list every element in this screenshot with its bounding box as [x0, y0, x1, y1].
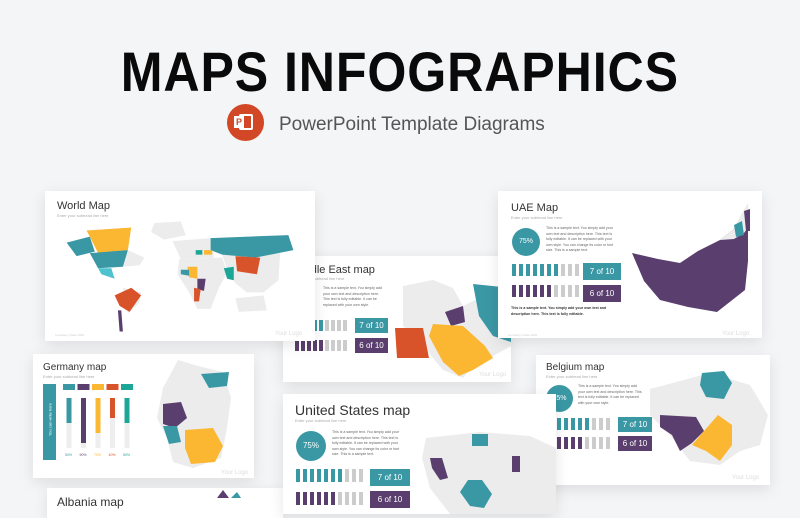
panel: albania map: Albania map — [57, 495, 124, 509]
panel: belgium map: 7 of 10 — [623, 420, 647, 429]
title: MAPS INFOGRAPHICS — [121, 40, 679, 103]
panel: uae map: 6 of 10 — [590, 289, 614, 298]
vertical label bar: You can write here — [48, 403, 52, 436]
panel: germany map: Your Logo — [221, 470, 248, 476]
panel: united states map: 6 of 10 — [378, 495, 402, 504]
panel: uae map: UAE Map — [511, 202, 558, 214]
panel: belgium map: 6 of 10 — [623, 439, 647, 448]
panel: germany map: Germany map — [43, 362, 106, 373]
panel: germany map — [33, 354, 254, 478]
panel: belgium map: Belgium map — [546, 362, 604, 373]
panel: united states map: United States map — [295, 402, 410, 418]
panel: uae map: 75% — [519, 238, 533, 245]
panel: middle east map: 7 of 10 — [359, 321, 384, 330]
panel: world map: Enter your subhead line here — [57, 213, 108, 218]
bar chart: 50% — [65, 453, 72, 457]
panel: united states map: 75% — [303, 441, 319, 450]
panel: middle east map: Middle East map — [293, 264, 375, 276]
panel: belgium map: 75% — [552, 395, 566, 402]
panel: middle east map: This is a sample text. You simply add your own text and description here. This text is fully editable. It can be replaced with your own style. — [323, 286, 382, 306]
bar chart — [63, 384, 133, 457]
map: belgium — [650, 371, 768, 465]
panel: uae map: Your Logo — [722, 331, 749, 337]
panel: uae map: This is a sample text. You simply add your own text and description here. This text is fully editable. — [511, 306, 606, 316]
panel: middle east map: Enter your subhead line here — [293, 276, 344, 281]
panel: united states map — [283, 394, 556, 514]
bar chart: 90% — [80, 453, 87, 457]
bar chart: 40% — [108, 453, 116, 457]
panel: belgium map: This is a sample text. You simply add your own text and description here. This text is fully editable. It can be replaced with your own style. — [578, 384, 642, 404]
panel: uae map: Company | Date 2020 — [508, 333, 537, 337]
panel: middle east map — [283, 256, 511, 382]
vertical label bar — [43, 384, 56, 460]
icon: powerpoint — [227, 104, 264, 141]
map: usa — [422, 432, 556, 514]
panel: world map: Company | Date 2020 — [55, 333, 84, 337]
panel: uae map: 7 of 10 — [590, 267, 614, 276]
map: germany — [157, 360, 231, 468]
panel: albania map — [47, 488, 283, 518]
icon: powerpoint: P — [236, 117, 242, 127]
panel: united states map: 7 of 10 — [378, 473, 402, 482]
panel: belgium map: Enter your subhead line here — [546, 374, 597, 379]
map: uae — [632, 204, 750, 312]
panel: belgium map — [536, 355, 770, 485]
panel: united states map: This is a sample text. You simply add your own text and description here. This text is fully editable. It can be replaced with your own style. You can change its color or font size. This is a sample text. — [332, 430, 399, 456]
panel: world map: Your Logo — [275, 331, 302, 337]
panel: uae map: This is a sample text. You simply add your own text and description here. This text is fully editable. It can be replaced with your own style. You can change its color or font size. This is a sample text. — [546, 226, 613, 252]
map: middle east — [395, 280, 511, 378]
panel: middle east map: Your Logo — [479, 372, 506, 378]
panel: belgium map: Your Logo — [732, 475, 759, 481]
panel: germany map: Enter your subhead line here — [43, 374, 94, 379]
bar chart: 70% — [94, 453, 101, 457]
panel: uae map: Enter your subhead line here — [511, 215, 562, 220]
panel: middle east map: 6 of 10 — [359, 341, 384, 350]
bar chart: 50% — [123, 453, 130, 457]
panel: world map — [45, 191, 315, 341]
panel: uae map — [498, 191, 762, 338]
panel: world map: World Map — [57, 200, 110, 212]
subtitle: PowerPoint Template Diagrams — [279, 114, 545, 135]
panel: united states map: Enter your subhead line here — [295, 418, 346, 423]
map: world — [66, 222, 294, 332]
